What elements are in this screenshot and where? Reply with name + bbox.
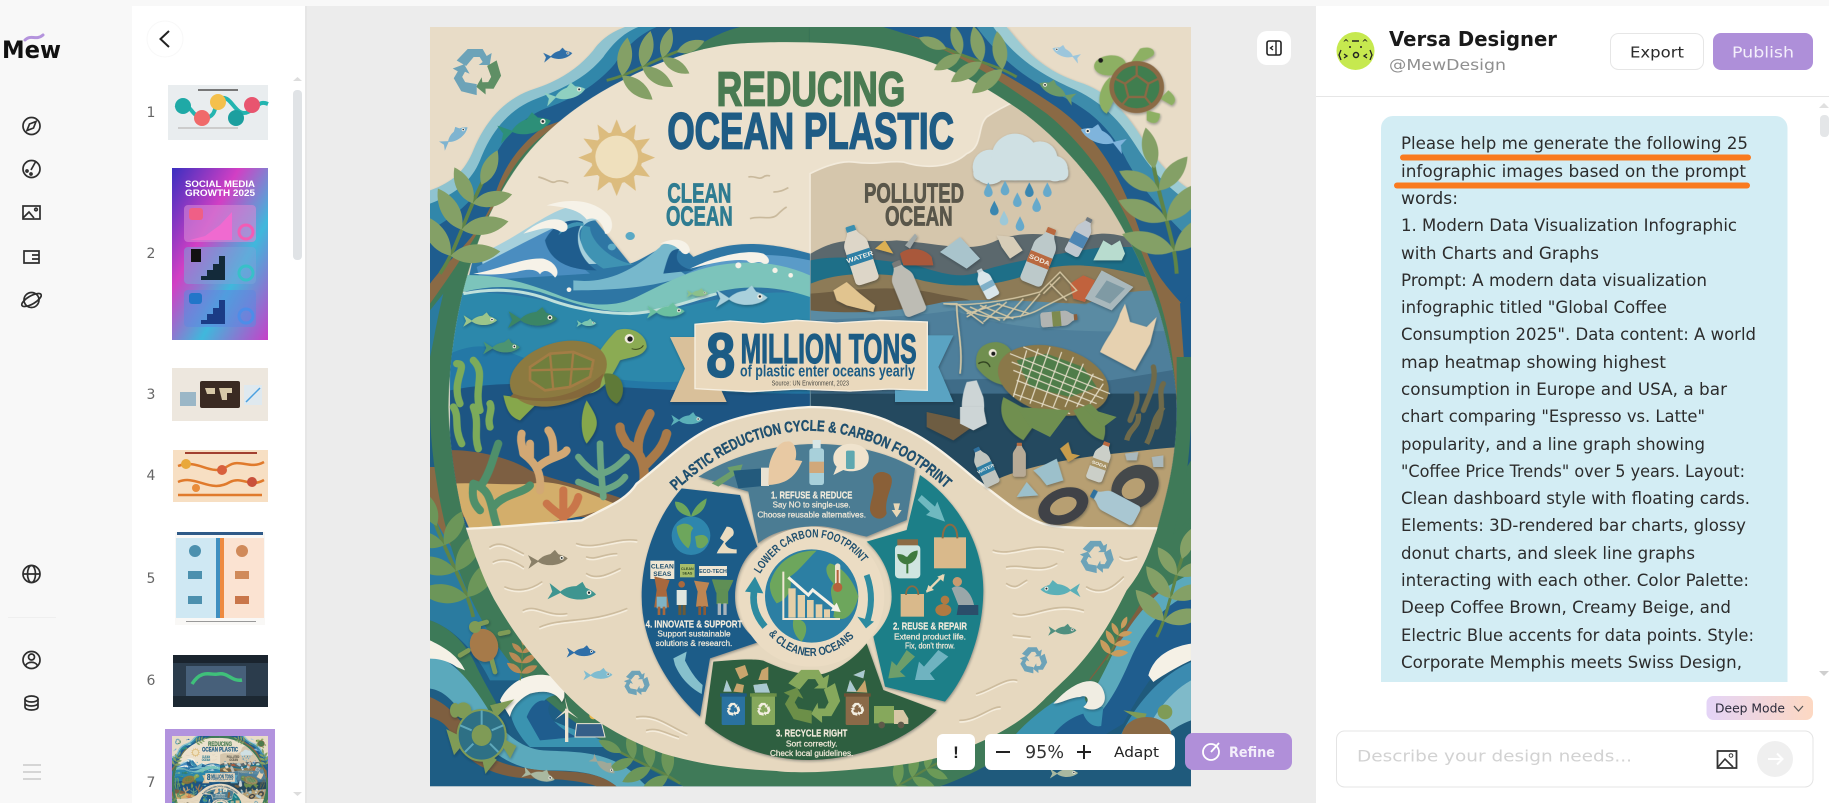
infographic poster: reducing ocean plastic bbox=[430, 27, 1191, 786]
user handle: @MewDesign bbox=[1389, 56, 1506, 74]
nav icons bbox=[20, 118, 43, 710]
turtle flippers bbox=[1017, 407, 1117, 437]
center globe: lower carbon footprint: LOWER CARBON FOOTPRINT bbox=[754, 529, 869, 574]
bottom-left frame bbox=[430, 407, 810, 786]
banner: 8 million tons bbox=[670, 320, 953, 402]
thumbnail 1: evolution of the web bbox=[168, 85, 268, 140]
heading: polluted ocean bbox=[864, 177, 964, 231]
icon: tyres bbox=[1033, 456, 1167, 532]
ribbon left bbox=[670, 337, 727, 402]
menu icon bbox=[23, 765, 41, 779]
chat message bubble: Prompt: A modern data visualization bbox=[1401, 271, 1707, 290]
segment 4: innovate and support: 4. INNOVATE & SUPPORT bbox=[646, 619, 743, 630]
chat message bubble: 1. Modern Data Visualization Infographic bbox=[1401, 216, 1737, 235]
segment 3: recycle right: Check local guidelines. bbox=[770, 748, 853, 758]
icon: bottles on the seabed: WATER bbox=[977, 463, 996, 476]
thumbnail 4: how to launch a podcast bbox=[173, 450, 268, 502]
polluted ocean scene bbox=[811, 234, 1191, 574]
chat message bubble: Clean dashboard style with floating cards. bbox=[1401, 489, 1750, 508]
segment 4: innovate and support: CLEAN bbox=[651, 563, 674, 570]
icon: bottles on the seabed: SODA bbox=[1091, 460, 1108, 470]
source: Source: UN Environment, 2023 bbox=[772, 379, 849, 388]
icon: water bottle: WATER bbox=[846, 250, 874, 265]
user name: Versa Designer bbox=[1389, 27, 1557, 51]
banner paper bbox=[695, 320, 927, 392]
sand ripples bbox=[490, 540, 1137, 739]
polluted sand bed bbox=[977, 447, 1191, 534]
assorted plastic bbox=[833, 215, 1157, 370]
icon: sad polluted turtle caught in net bbox=[976, 333, 1117, 440]
chat message bubble: infographic titled "Global Coffee bbox=[1401, 298, 1667, 317]
icon: sea turtle top-right bbox=[1093, 48, 1175, 123]
heading: clean ocean bbox=[666, 177, 733, 231]
info button: ! bbox=[953, 743, 959, 762]
heading: clean ocean: CLEAN bbox=[667, 177, 731, 208]
corner wave bottom-left bbox=[500, 674, 603, 747]
canvas area bbox=[305, 6, 1316, 803]
sky paper bbox=[430, 27, 1191, 560]
thumbnail numbers: 6 bbox=[147, 673, 156, 689]
left navigation sidebar bbox=[2, 35, 61, 779]
avatar: ^ bbox=[1343, 38, 1349, 47]
thumbnail 2: social media growth 2025: GROWTH 2025 bbox=[185, 188, 256, 199]
chat message bubble: map heatmap showing highest bbox=[1401, 353, 1667, 372]
subtitle: of plastic enter oceans yearly bbox=[740, 361, 916, 380]
canvas controls bbox=[937, 31, 1292, 770]
center globe: lower carbon footprint: & CLEANER OCEANS bbox=[769, 630, 854, 656]
icon: small brown turtle left bbox=[460, 621, 508, 672]
publish button bbox=[1713, 33, 1813, 70]
back button bbox=[147, 21, 183, 57]
segment 4: innovate and support: Support sustainable bbox=[657, 629, 731, 639]
message input box: Describe your design needs... bbox=[1357, 746, 1632, 766]
message input box bbox=[1336, 731, 1813, 787]
center globe: lower carbon footprint bbox=[745, 526, 874, 656]
icon: water bottle bbox=[837, 222, 881, 287]
net bbox=[943, 272, 1077, 374]
chat message bubble: "Coffee Price Trends" over 5 years. Layout: bbox=[1401, 462, 1745, 481]
clean ocean scene bbox=[450, 201, 810, 547]
heading: polluted ocean: POLLUTED bbox=[864, 177, 964, 208]
plastic reduction cycle wheel bbox=[602, 406, 1024, 772]
segment 1: refuse and reduce bbox=[698, 440, 915, 543]
segment 1: refuse and reduce: 1. REFUSE & REDUCE bbox=[771, 490, 852, 501]
sand fish and recycle marks bbox=[527, 541, 1118, 698]
segment 2: reuse and repair: Fix, don't throw. bbox=[905, 641, 955, 651]
thumbnail 6: dark data scene bbox=[173, 655, 268, 707]
avatar: ^ bbox=[1362, 38, 1368, 47]
icon: leaf sprigs top bbox=[398, 2, 1230, 295]
segment 2: reuse and repair bbox=[867, 475, 983, 702]
zoom controls: Adapt bbox=[1114, 745, 1160, 761]
thumbnail numbers: 3 bbox=[147, 387, 155, 403]
thumbnail numbers: 2 bbox=[147, 246, 155, 262]
heading: polluted ocean: OCEAN bbox=[885, 200, 953, 231]
thumbnail 7: selected ocean plastic bbox=[165, 729, 275, 803]
chat message bubble: interacting with each other. Color Palette: bbox=[1401, 571, 1749, 590]
chat message bubble: chart comparing "Espresso vs. Latte" bbox=[1401, 407, 1705, 426]
segment 1: refuse and reduce: Choose reusable alternatives. bbox=[757, 509, 866, 519]
refine button: Refine bbox=[1229, 745, 1275, 761]
thumbnail numbers bbox=[147, 105, 156, 791]
icon: sun bbox=[578, 119, 655, 196]
chat message bubble bbox=[1381, 116, 1788, 682]
million tons: MILLION TONS bbox=[741, 325, 917, 372]
thumbnail 3: global coffee consumption bbox=[172, 368, 268, 421]
segment 1: refuse and reduce: Say NO to single-use. bbox=[773, 500, 851, 510]
icon: turtle bottom-right bbox=[1122, 704, 1172, 734]
thumbnail numbers: 7 bbox=[147, 775, 155, 791]
poster titles bbox=[666, 63, 964, 231]
chat message bubble: Consumption 2025". Data content: A world bbox=[1401, 325, 1756, 344]
heading: clean ocean: OCEAN bbox=[666, 200, 733, 231]
export button bbox=[1610, 34, 1704, 70]
polluted seabed objects bbox=[927, 407, 1167, 532]
info button bbox=[937, 734, 975, 770]
thumbnail numbers: 5 bbox=[147, 571, 155, 587]
icon: soda bottle bbox=[1019, 224, 1063, 288]
cloud and rain bbox=[973, 134, 1068, 231]
bottom leaves and small objects bbox=[380, 472, 1232, 803]
corner wave bottom-right bbox=[1016, 680, 1107, 734]
icon: plastic bag and kelp bbox=[962, 367, 1163, 427]
arc heading: PLASTIC REDUCTION CYCLE & CARBON FOOTPRINT bbox=[669, 420, 953, 491]
deep mode pill bbox=[1706, 696, 1813, 720]
icon: recycle symbol top-left bbox=[449, 49, 507, 101]
deep mode pill: Deep Mode bbox=[1715, 700, 1785, 716]
icon: sea plants bbox=[457, 360, 480, 410]
fish group clean ocean bbox=[463, 285, 768, 354]
title: reducing: REDUCING bbox=[717, 63, 905, 117]
top-left layered wave frame bbox=[430, 27, 810, 407]
green ring lower outer edge bbox=[430, 407, 1191, 786]
top-right layered wave frame bbox=[810, 27, 1191, 410]
refine button bbox=[1185, 733, 1292, 770]
segment 3: recycle right bbox=[705, 643, 937, 760]
thumbnail scrollbar bbox=[293, 77, 302, 796]
chat message bubble: Corporate Memphis meets Swiss Design, bbox=[1401, 653, 1742, 672]
thumbnail numbers: 1 bbox=[147, 105, 155, 121]
chat message bubble: Deep Coffee Brown, Creamy Beige, and bbox=[1401, 598, 1731, 617]
segment 2: reuse and repair: Extend product life. bbox=[894, 631, 966, 641]
icon: bottles on the seabed bbox=[927, 407, 1163, 526]
chat message bubble: infographic images based on the prompt bbox=[1401, 162, 1747, 181]
chat message bubble: donut charts, and sleek line graphs bbox=[1401, 544, 1695, 563]
segment 4: innovate and support: solutions & research. bbox=[656, 638, 732, 648]
chat message bubble: popularity, and a line graph showing bbox=[1401, 435, 1705, 454]
thumbnail numbers: 4 bbox=[147, 468, 156, 484]
icon: turtle bottom-left bbox=[450, 702, 513, 769]
chat message bubble: Electric Blue accents for data points. Style: bbox=[1401, 626, 1754, 645]
title: ocean plastic: OCEAN PLASTIC bbox=[667, 103, 954, 160]
segment 2: reuse and repair: 2. REUSE & REPAIR bbox=[893, 621, 967, 632]
publish button: Publish bbox=[1732, 44, 1794, 62]
inside the ring bbox=[430, 27, 1191, 786]
segment 4: innovate and support: ECO-TECH bbox=[699, 569, 727, 575]
segment 3: recycle right: Sort correctly. bbox=[786, 739, 837, 749]
export button: Export bbox=[1630, 44, 1684, 62]
icon: tiny wind turbine and solar panel bbox=[555, 695, 605, 742]
thumbnail 2: social media growth 2025: SOCIAL MEDIA bbox=[185, 179, 255, 190]
segment 3: recycle right: 3. RECYCLE RIGHT bbox=[776, 729, 848, 740]
chat message bubble: with Charts and Graphs bbox=[1401, 244, 1599, 263]
poster paper background bbox=[430, 27, 1191, 786]
frame fish and recycle icons bbox=[437, 42, 1129, 786]
segment 4: innovate and support: SEAS bbox=[682, 572, 693, 576]
chat message bubble: consumption in Europe and USA, a bar bbox=[1401, 380, 1727, 399]
thumbnail 2: social media growth 2025 bbox=[172, 168, 268, 340]
trash and debris bbox=[833, 215, 1157, 374]
orange hand-drawn underlines bbox=[1397, 158, 1748, 186]
icon: coral cluster bbox=[453, 404, 667, 525]
collapse panel button bbox=[1257, 31, 1291, 65]
thumbnail 5: remote vs office work bbox=[175, 532, 265, 625]
segment 4: innovate and support: SEAS bbox=[653, 571, 672, 578]
right chat panel bbox=[1316, 6, 1829, 803]
chat scrollbar bbox=[1819, 103, 1829, 676]
clean seabed with corals bbox=[447, 404, 667, 530]
ribbon right bbox=[895, 335, 953, 402]
avatar bbox=[1336, 32, 1374, 70]
zoom controls bbox=[985, 734, 1175, 770]
icon: happy sea turtle bbox=[501, 329, 647, 444]
sand ground lower half, torn top edge bbox=[430, 407, 1191, 786]
chat message bubble: Elements: 3D-rendered bar charts, glossy bbox=[1401, 516, 1746, 535]
bottom-right frame bbox=[810, 407, 1191, 786]
segment 4: innovate and support: CLEAN bbox=[681, 567, 694, 571]
chat message bubble: words: bbox=[1401, 189, 1458, 208]
polluted sky torn paper bbox=[810, 100, 1191, 407]
segment 4: innovate and support bbox=[642, 488, 760, 717]
zoom controls: 95% bbox=[1025, 742, 1064, 763]
thumbnail panel bbox=[132, 6, 307, 803]
logo: Mew: Mew bbox=[2, 36, 61, 64]
birds bbox=[538, 176, 788, 219]
chat message bubble: Please help me generate the following 25 bbox=[1401, 134, 1748, 153]
icon: soda bottle: SODA bbox=[1028, 254, 1050, 268]
divider bbox=[8, 617, 56, 618]
big number 8: 8 bbox=[706, 321, 735, 391]
